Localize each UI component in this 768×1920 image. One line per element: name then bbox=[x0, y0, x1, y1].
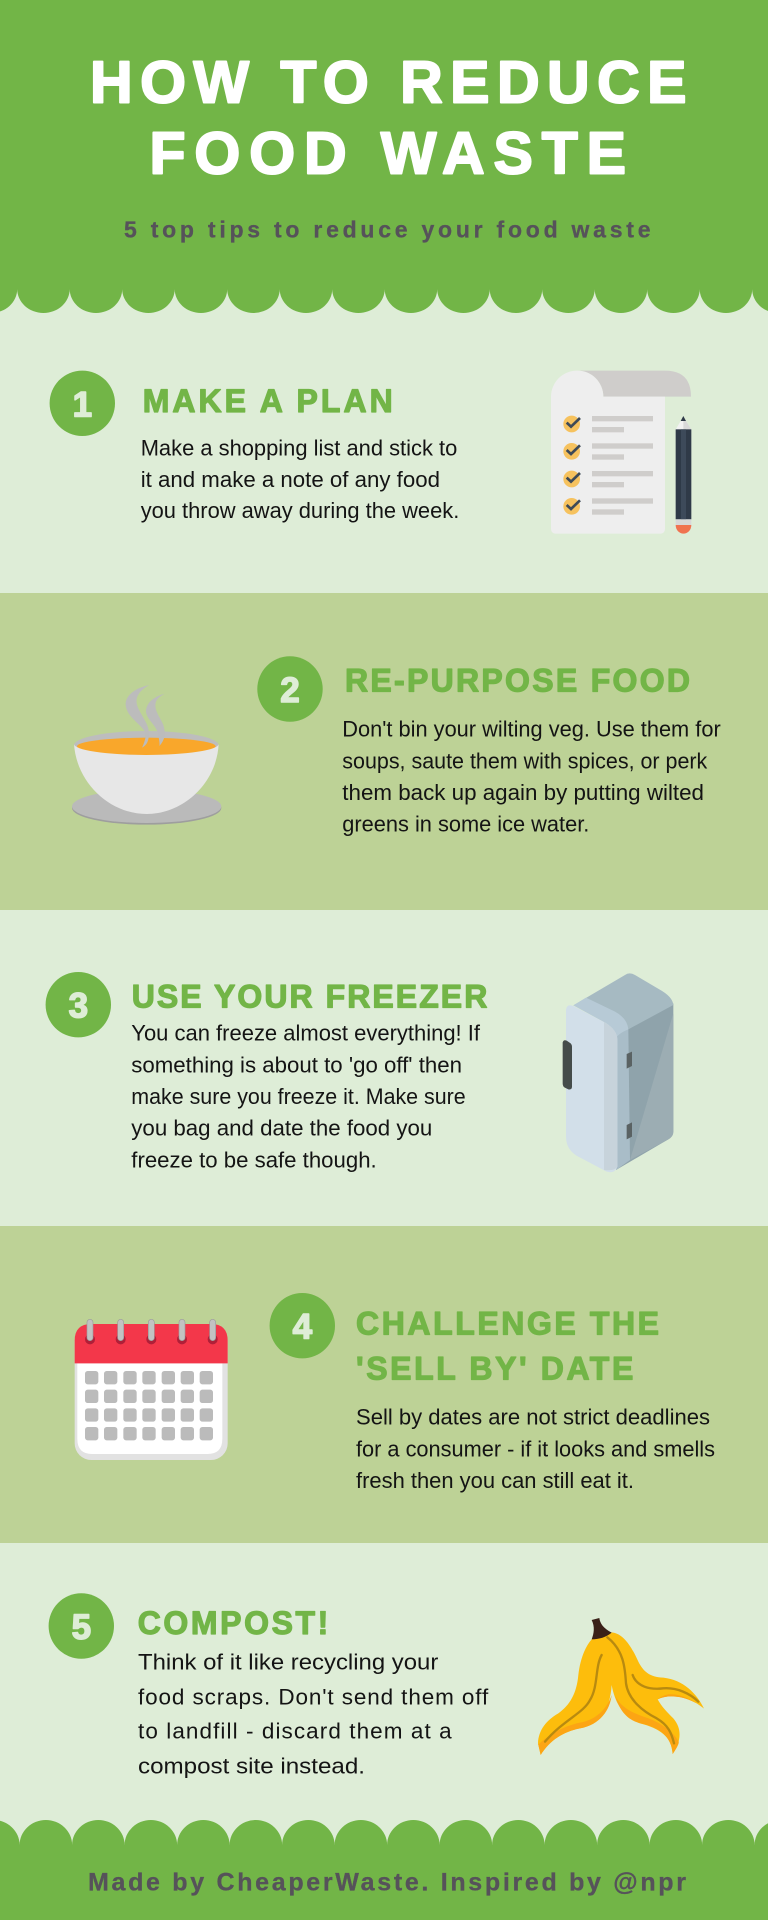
panel: tip 5 compost bbox=[0, 1543, 768, 1853]
text: use your freezer body bbox=[131, 1021, 481, 1172]
title: FOOD WASTE bbox=[150, 120, 626, 186]
number badge 4: 4 bbox=[293, 1308, 313, 1347]
text: compost body bbox=[138, 1649, 489, 1778]
text: use your freezer body: make sure you freeze it. Make sure bbox=[131, 1084, 466, 1109]
title: HOW TO REDUCE bbox=[90, 50, 686, 116]
number badge 5 bbox=[49, 1593, 114, 1659]
icon: calendar bbox=[75, 1319, 228, 1460]
heading: challenge the sell by date bbox=[356, 1305, 659, 1386]
text: use your freezer body: you bag and date the food you bbox=[131, 1116, 432, 1141]
text: sell by date body bbox=[356, 1404, 715, 1493]
number badge 3: 3 bbox=[69, 987, 88, 1026]
text: sell by date body: for a consumer - if it looks and smells bbox=[356, 1436, 715, 1461]
text: compost body: Think of it like recycling your bbox=[138, 1649, 439, 1674]
heading: re-purpose food: RE-PURPOSE FOOD bbox=[345, 663, 690, 699]
panel: tip 4 challenge the sell by date bbox=[0, 1226, 768, 1543]
text: sell by date body: fresh then you can still eat it. bbox=[356, 1468, 634, 1493]
header banner bbox=[0, 0, 768, 313]
number badge 2 bbox=[257, 656, 323, 722]
heading: make a plan: MAKE A PLAN bbox=[143, 383, 393, 419]
heading: use your freezer: USE YOUR FREEZER bbox=[132, 978, 487, 1014]
number badge 4 bbox=[270, 1293, 335, 1358]
text: use your freezer body: something is about to 'go off' then bbox=[131, 1053, 462, 1078]
icon: fridge freezer bbox=[563, 973, 673, 1172]
heading: challenge the sell by date: CHALLENGE THE bbox=[356, 1305, 659, 1341]
number badge 1 bbox=[50, 371, 115, 436]
text: compost body: food scraps. Don't send them off bbox=[138, 1684, 489, 1709]
text: re-purpose food body: them back up again by putting wilted bbox=[342, 780, 704, 805]
subtitle: 5 top tips to reduce your food waste bbox=[124, 217, 651, 243]
footer credit text: Made by CheaperWaste. Inspired by @npr bbox=[88, 1869, 686, 1897]
number badge 1: 1 bbox=[73, 385, 92, 424]
text: re-purpose food body: soups, saute them with spices, or perk bbox=[342, 748, 708, 773]
text: re-purpose food body bbox=[342, 717, 721, 837]
title bbox=[90, 50, 686, 186]
heading: compost: COMPOST! bbox=[138, 1605, 328, 1641]
footer banner bbox=[0, 1820, 768, 1920]
icon: banana peel bbox=[538, 1618, 704, 1755]
text: use your freezer body: freeze to be safe though. bbox=[131, 1147, 377, 1172]
text: sell by date body: Sell by dates are not strict deadlines bbox=[356, 1404, 710, 1429]
text: compost body: compost site instead. bbox=[138, 1753, 365, 1778]
text: make a plan body bbox=[141, 436, 459, 523]
text: use your freezer body: You can freeze almost everything! If bbox=[131, 1021, 481, 1046]
number badge 3 bbox=[46, 972, 111, 1037]
panel: tip 2 re-purpose food bbox=[0, 593, 768, 910]
number badge 5: 5 bbox=[72, 1608, 91, 1647]
heading: challenge the sell by date: 'SELL BY' DATE bbox=[356, 1350, 633, 1386]
icon: bowl of soup bbox=[72, 685, 221, 825]
text: make a plan body: you throw away during the week. bbox=[141, 498, 459, 523]
icon: checklist and pencil bbox=[551, 371, 691, 534]
text: compost body: to landfill - discard them at a bbox=[138, 1718, 452, 1743]
panel: tip 3 use your freezer bbox=[0, 910, 768, 1226]
text: re-purpose food body: Don't bin your wilting veg. Use them for bbox=[342, 717, 721, 742]
number badge 2: 2 bbox=[280, 671, 300, 710]
text: make a plan body: Make a shopping list and stick to bbox=[141, 436, 457, 461]
text: re-purpose food body: greens in some ice water. bbox=[342, 812, 589, 837]
text: make a plan body: it and make a note of any food bbox=[141, 467, 440, 492]
panel: tip 1 make a plan bbox=[0, 280, 768, 593]
